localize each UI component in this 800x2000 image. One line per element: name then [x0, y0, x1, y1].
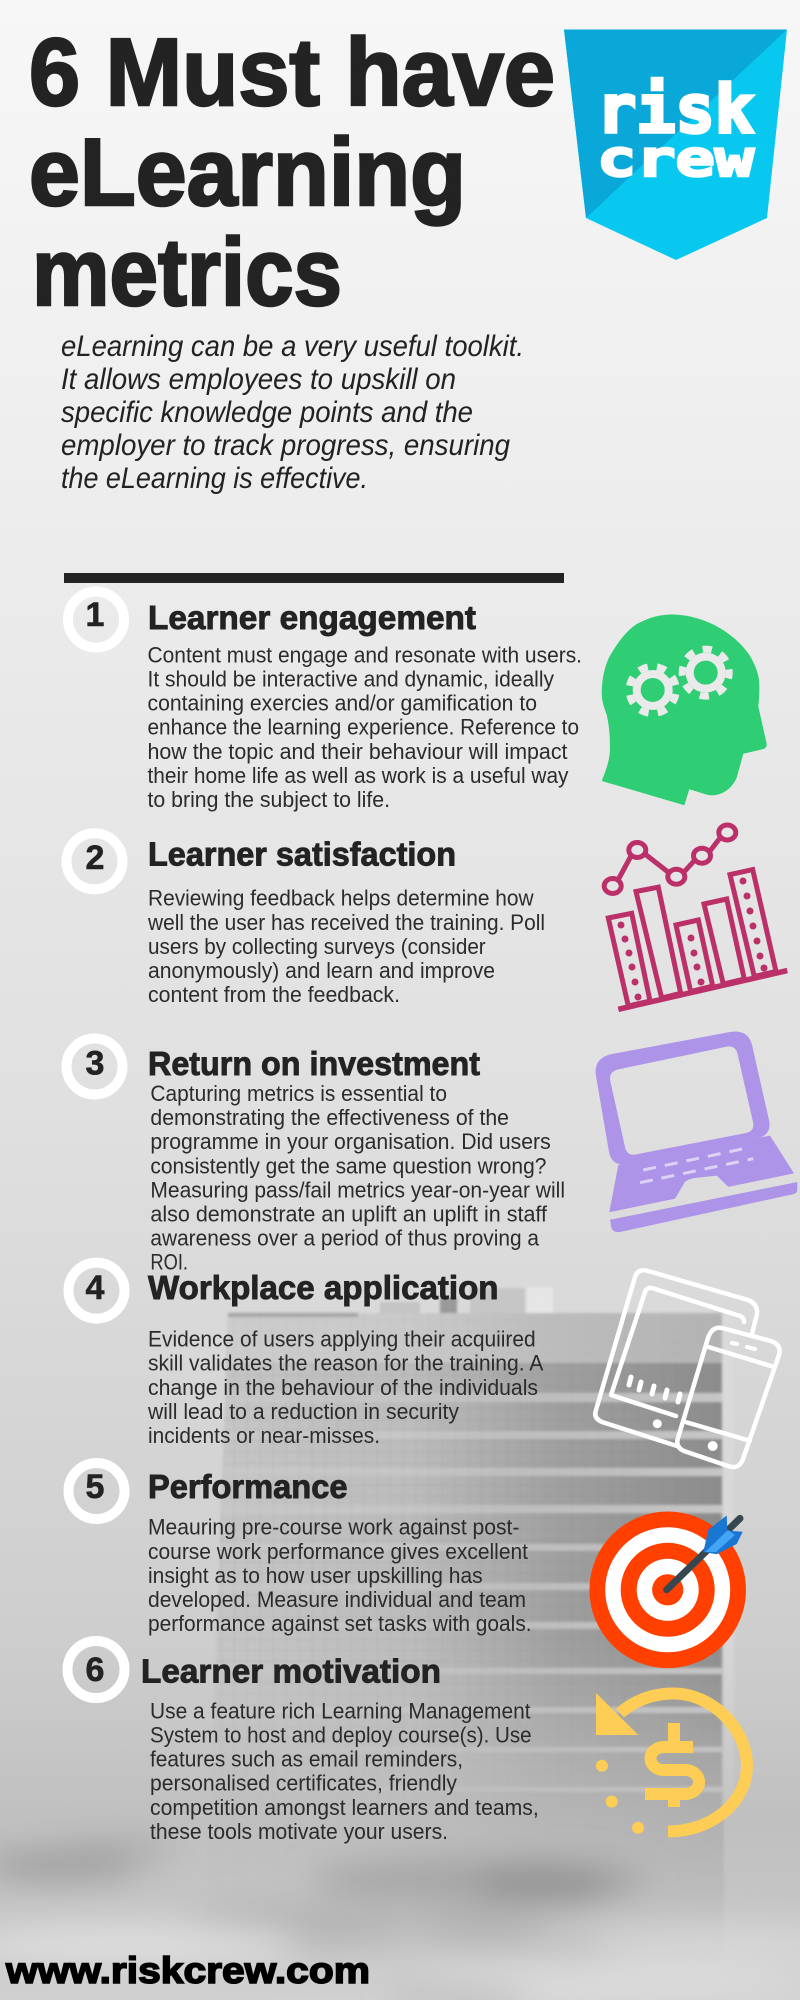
intro text: employer to track progress, ensuring	[61, 429, 510, 462]
intro text: eLearning can be a very useful toolkit.	[61, 330, 524, 363]
icon: laptop	[596, 1032, 797, 1232]
heading 4: Workplace application	[148, 1269, 498, 1306]
title: metrics	[32, 219, 342, 326]
body text 5	[148, 1515, 532, 1636]
body text 1: how the topic and their behaviour will impact	[148, 739, 568, 764]
body text 4: incidents or near-misses.	[148, 1423, 380, 1448]
icon: tablet and phone	[595, 1270, 780, 1467]
body text 3: consistently get the same question wrong?	[150, 1153, 546, 1178]
body text 3: also demonstrate an uplift an uplift in staff	[150, 1202, 548, 1226]
logo: riskcrew shield: risk	[597, 71, 754, 148]
heading 3: Return on investment	[148, 1045, 480, 1082]
intro text: the eLearning is effective.	[61, 462, 368, 495]
icon: dollar return arrow	[596, 1693, 747, 1834]
number badge 1: 1	[86, 596, 104, 634]
body text 2: Reviewing feedback helps determine how	[148, 886, 534, 911]
body text 2: content from the feedback.	[148, 982, 400, 1007]
body text 4: will lead to a reduction in security	[147, 1399, 459, 1424]
logo: riskcrew shield: crew	[597, 130, 755, 188]
body text 5: developed. Measure individual and team	[148, 1587, 526, 1612]
body text 3: awareness over a period of thus proving a	[150, 1226, 540, 1251]
body text 4: Evidence of users applying their acquiired	[148, 1327, 536, 1352]
title	[29, 19, 555, 326]
body text 6: these tools motivate your users.	[150, 1819, 448, 1844]
logo: riskcrew shield	[564, 30, 787, 260]
body text 3: ROI.	[150, 1250, 188, 1275]
body text 6: System to host and deploy course(s). Use	[150, 1722, 532, 1748]
intro text: It allows employees to upskill on	[61, 363, 456, 396]
body text 4: change in the behaviour of the individuals	[148, 1375, 538, 1400]
title: 6 Must have	[29, 19, 555, 126]
body text 1: their home life as well as work is a useful way	[148, 763, 568, 788]
number badge 6: 6	[86, 1651, 104, 1689]
heading 6: Learner motivation	[141, 1652, 441, 1690]
body text 5: performance against set tasks with goals.	[148, 1611, 532, 1636]
body text 1: to bring the subject to life.	[148, 787, 390, 812]
number badge 3	[66, 1038, 122, 1094]
heading 2: Learner satisfaction	[148, 836, 456, 872]
heading 1: Learner engagement	[148, 599, 476, 636]
body text 1: It should be interactive and dynamic, ideally	[148, 666, 554, 692]
panel: 5 performance	[68, 1463, 532, 1636]
number badge 4	[68, 1263, 124, 1319]
body text 1	[148, 642, 582, 812]
body text 3: demonstrating the effectiveness of the	[150, 1105, 509, 1130]
title: eLearning	[29, 119, 466, 226]
body text 4: skill validates the reason for the training. A	[148, 1351, 544, 1376]
number badge 5	[68, 1463, 124, 1519]
body text 6	[150, 1698, 539, 1844]
panel: 4 workplace application	[68, 1263, 544, 1448]
body text 1: Content must engage and resonate with users.	[148, 642, 582, 667]
body text 1: containing exercies and/or gamification to	[148, 691, 537, 716]
body text 2	[147, 886, 545, 1007]
footer url: www.riskcrew.com	[5, 1950, 370, 1991]
icon: bar and line chart	[604, 825, 787, 1009]
body text 2: well the user has received the training. Poll	[147, 910, 545, 935]
number badge 2	[66, 833, 122, 889]
number badge 4: 4	[86, 1269, 105, 1307]
body text 2: users by collecting surveys (consider	[148, 934, 486, 959]
icon: head with gears	[602, 614, 767, 805]
body text 5: Meauring pre-course work against post-	[148, 1515, 519, 1540]
intro text	[61, 330, 524, 495]
body text 4	[147, 1327, 544, 1448]
panel: 2 learner satisfaction	[66, 833, 545, 1007]
body text 3: Measuring pass/fail metrics year-on-year will	[150, 1177, 565, 1202]
body text 2: anonymously) and learn and improve	[148, 958, 495, 983]
divider bar	[64, 573, 564, 583]
body text 3: programme in your organisation. Did users	[150, 1129, 551, 1154]
body text 3: Capturing metrics is essential to	[150, 1081, 447, 1106]
body text 6: Use a feature rich Learning Management	[150, 1698, 531, 1723]
panel: 3 return on investment	[66, 1038, 565, 1275]
body text 5: insight as to how user upskilling has	[148, 1563, 483, 1588]
number badge 2: 2	[86, 839, 104, 877]
number badge 6	[68, 1641, 124, 1698]
body text 5: course work performance gives excellent	[148, 1539, 528, 1564]
intro text: specific knowledge points and the	[61, 396, 473, 429]
number badge 5: 5	[86, 1468, 104, 1506]
body text 6: features such as email reminders,	[150, 1747, 463, 1772]
body text 6: competition amongst learners and teams,	[150, 1795, 539, 1820]
panel: 6 learner motivation	[68, 1641, 539, 1844]
body text 1: enhance the learning experience. Reference to	[148, 715, 579, 740]
heading 5: Performance	[148, 1468, 348, 1505]
icon: target with dart	[589, 1512, 746, 1668]
body text 6: personalised certificates, friendly	[150, 1771, 457, 1796]
number badge 1	[68, 592, 124, 648]
number badge 3: 3	[86, 1044, 104, 1082]
panel: 1 learner engagement	[68, 592, 582, 812]
body text 3	[150, 1081, 565, 1275]
